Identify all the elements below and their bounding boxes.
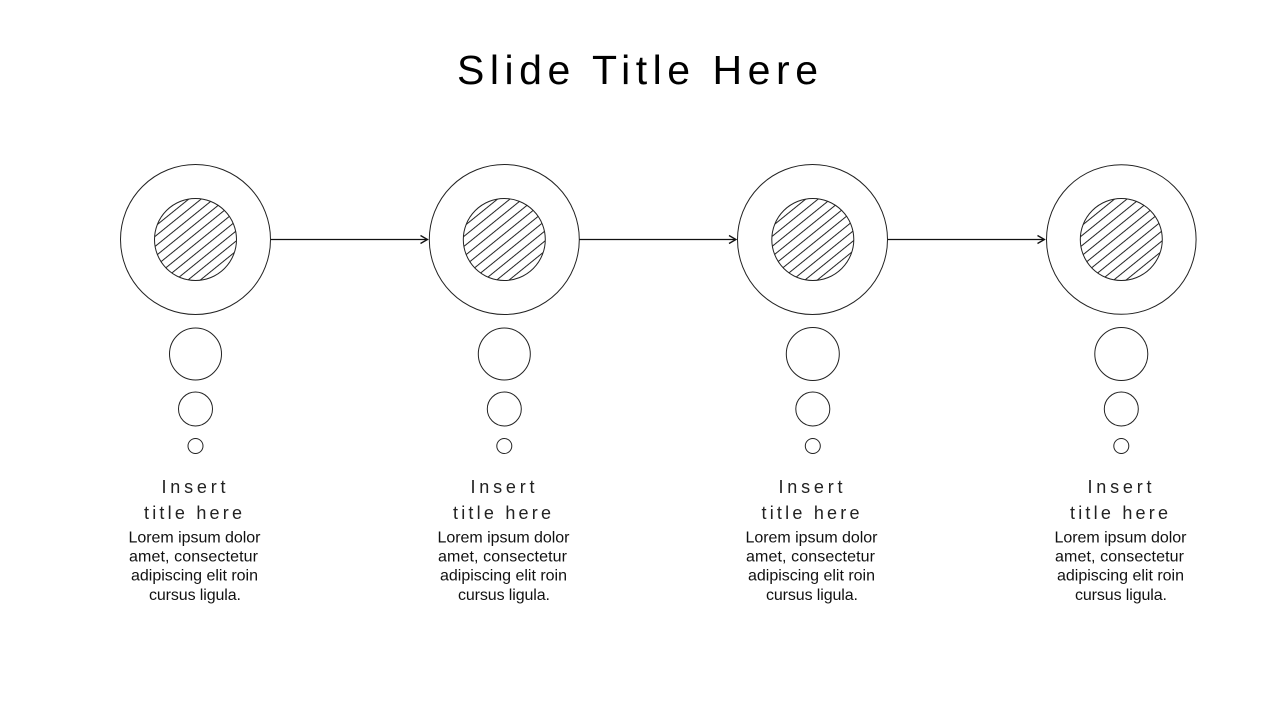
column 1 body text: cursus ligula. [149,587,241,604]
hatched inner circle [772,198,854,280]
column 2 heading: Insert [470,477,534,497]
small bubble [1114,438,1129,454]
column 4 heading: Insert [1088,477,1152,497]
large bubble [170,328,222,380]
column 3 body text: cursus ligula. [766,587,858,604]
medium bubble [1104,392,1138,426]
column 1 body text: Lorem ipsum dolor [128,530,261,546]
column 4 body text: Lorem ipsum dolor [1054,530,1187,546]
column 3 body text: amet, consectetur [746,548,876,566]
column 4 heading [1070,477,1168,523]
column 2 heading: title here [453,503,551,523]
small bubble [188,438,203,454]
column 3 heading: title here [762,503,860,523]
medium bubble [796,392,830,426]
small bubble [497,438,512,454]
column 1 heading: title here [144,503,242,523]
hatched inner circle [154,198,236,280]
medium bubble [487,392,521,426]
large ring [429,164,579,314]
arrow 2 to 3 [580,236,736,244]
title: Slide Title Here [457,47,818,93]
column 2 body text: cursus ligula. [458,587,550,604]
column 2 body text: amet, consectetur [438,548,568,566]
column 2 [429,164,579,604]
medium bubble [178,392,212,426]
column 3 body text: Lorem ipsum dolor [746,530,878,546]
column 4 body text [1054,530,1187,604]
column 3 body text: adipiscing elit roin [748,568,875,584]
column 1 body text: adipiscing elit roin [131,568,258,584]
column 4 body text: adipiscing elit roin [1057,568,1184,584]
column 2 body text: adipiscing elit roin [440,568,567,584]
large ring [120,164,270,314]
column 4 body text: cursus ligula. [1075,587,1167,604]
column 4 body text: amet, consectetur [1055,548,1185,566]
column 4 heading: title here [1070,503,1168,523]
large bubble [1095,328,1148,380]
column 3 [738,164,888,604]
large ring [738,164,888,314]
column 2 heading [453,477,551,523]
column 2 body text: Lorem ipsum dolor [438,530,570,546]
hatched inner circle [1080,198,1162,280]
column 1 [120,164,270,604]
large ring [1046,165,1196,314]
hatched inner circle [463,198,545,280]
large bubble [478,328,530,380]
column 2 body text [438,530,570,604]
arrow 1 to 2 [271,236,428,244]
column 3 heading [762,477,860,523]
column 4 [1046,165,1196,604]
large bubble [786,328,839,380]
small bubble [805,438,820,454]
column 1 body text: amet, consectetur [129,548,259,566]
column 3 heading: Insert [778,477,842,497]
arrow 3 to 4 [888,236,1044,244]
column 3 body text [746,530,878,604]
column 1 body text [128,530,261,604]
column 1 heading: Insert [162,477,226,497]
column 1 heading [144,477,242,523]
